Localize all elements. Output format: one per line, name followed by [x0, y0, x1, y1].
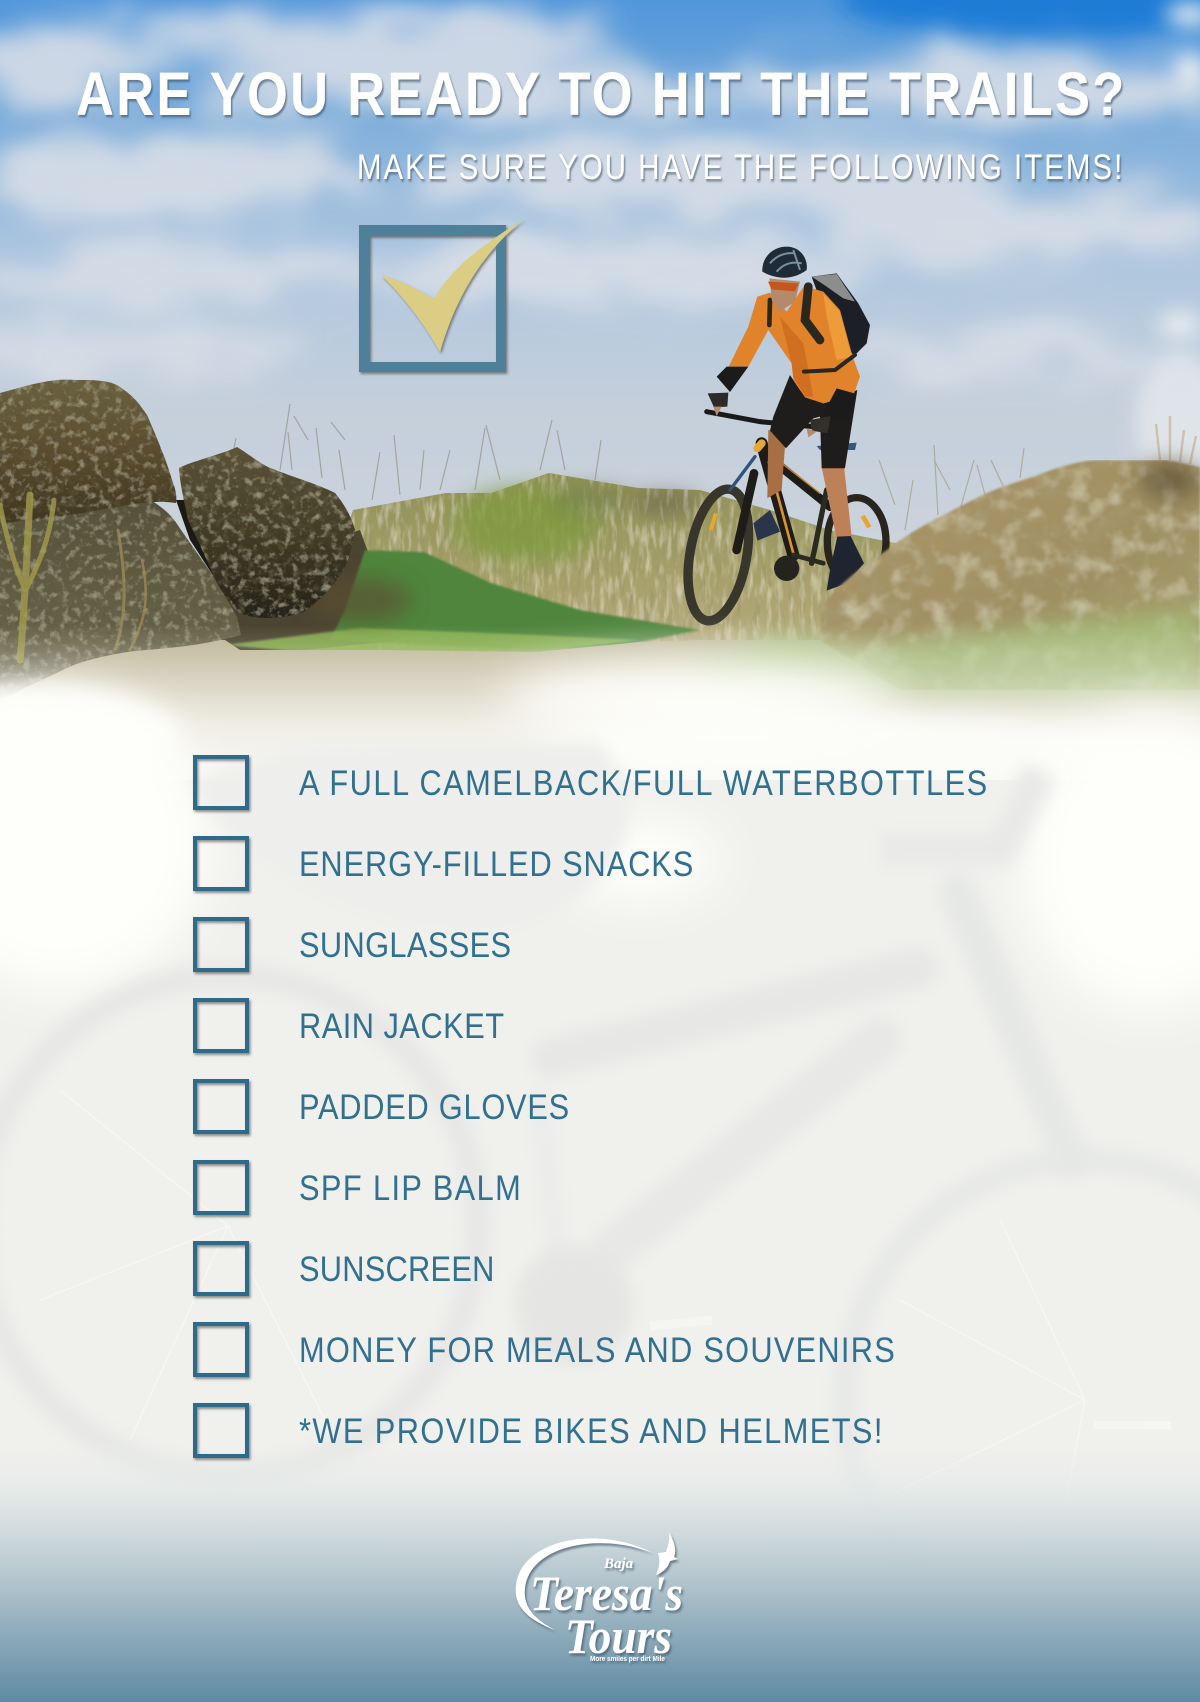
rider legs — [753, 430, 864, 591]
item 5: PADDED GLOVES — [299, 1087, 569, 1126]
foreground grass tuft — [0, 495, 146, 660]
subtitle: MAKE SURE YOU HAVE THE FOLLOWING ITEMS! — [357, 148, 1122, 187]
sky — [0, 0, 1200, 600]
item 8: MONEY FOR MEALS AND SOUVENIRS — [299, 1330, 895, 1369]
item 3: SUNGLASSES — [299, 925, 511, 964]
dry grass hill behind the trail — [310, 471, 898, 652]
bike frame — [707, 412, 830, 581]
icon: large checked box — [359, 219, 524, 372]
ghost rider body — [208, 742, 623, 882]
logo Teresa's word: Teresa's — [530, 1565, 683, 1621]
item 7: SUNSCREEN — [299, 1249, 494, 1288]
item 7 — [195, 1243, 494, 1294]
green trail bank — [225, 550, 700, 652]
logo swoosh — [516, 1538, 653, 1630]
item 4 — [195, 1000, 504, 1051]
logo Tours word: Tours — [565, 1608, 672, 1664]
jacket straps — [769, 287, 855, 372]
item 9 — [195, 1405, 882, 1456]
ghost wheels — [65, 973, 194, 1030]
item 2: ENERGY-FILLED SNACKS — [299, 844, 693, 883]
item 1: A FULL CAMELBACK/FULL WATERBOTTLES — [299, 763, 987, 802]
item 2 — [195, 838, 693, 889]
trail ground — [22, 640, 1200, 754]
ghost chainring — [520, 1253, 628, 1358]
right foreground rock — [820, 460, 1200, 690]
item 8 — [195, 1324, 895, 1375]
logo Baja word: Baja — [603, 1556, 634, 1572]
ghost handlebar and glove — [992, 767, 1050, 859]
ghost crank, pedal and spokes — [40, 1090, 1171, 1640]
rider head with helmet and glasses — [762, 247, 807, 312]
logo: Baja Teresa's Tours — [516, 1532, 683, 1664]
item 6 — [195, 1162, 521, 1213]
checklist — [195, 757, 987, 1456]
bottom blue gradient — [0, 1440, 1200, 1702]
dried bushes on the horizon — [232, 404, 1196, 530]
main title: ARE YOU READY TO HIT THE TRAILS? — [76, 60, 1124, 129]
white fade into list area — [0, 625, 1200, 786]
rider orange jacket — [729, 286, 860, 403]
shaded soil between rocks and bank — [215, 530, 372, 650]
ghosted bicycle photo behind checklist — [0, 621, 1200, 1358]
foreground green grass — [690, 610, 1200, 700]
logo tagline: More smiles per dirt Mile — [590, 1656, 665, 1663]
item 3 — [195, 919, 511, 970]
item 6: SPF LIP BALM — [299, 1168, 521, 1207]
item 9: *WE PROVIDE BIKES AND HELMETS! — [299, 1411, 882, 1450]
rider sleeves and gloves — [708, 367, 857, 437]
logo bird — [656, 1532, 678, 1575]
ghost white patches — [0, 660, 1200, 1010]
rider backpack — [812, 273, 870, 356]
item 1 — [195, 757, 987, 808]
ghost frame tubes — [544, 884, 1072, 1143]
cyclist on mountain bike — [679, 247, 886, 626]
bike wheels — [679, 484, 886, 626]
item 5 — [195, 1081, 569, 1132]
left rocks — [0, 380, 355, 700]
rider shorts — [770, 375, 857, 468]
item 4: RAIN JACKET — [299, 1006, 504, 1045]
